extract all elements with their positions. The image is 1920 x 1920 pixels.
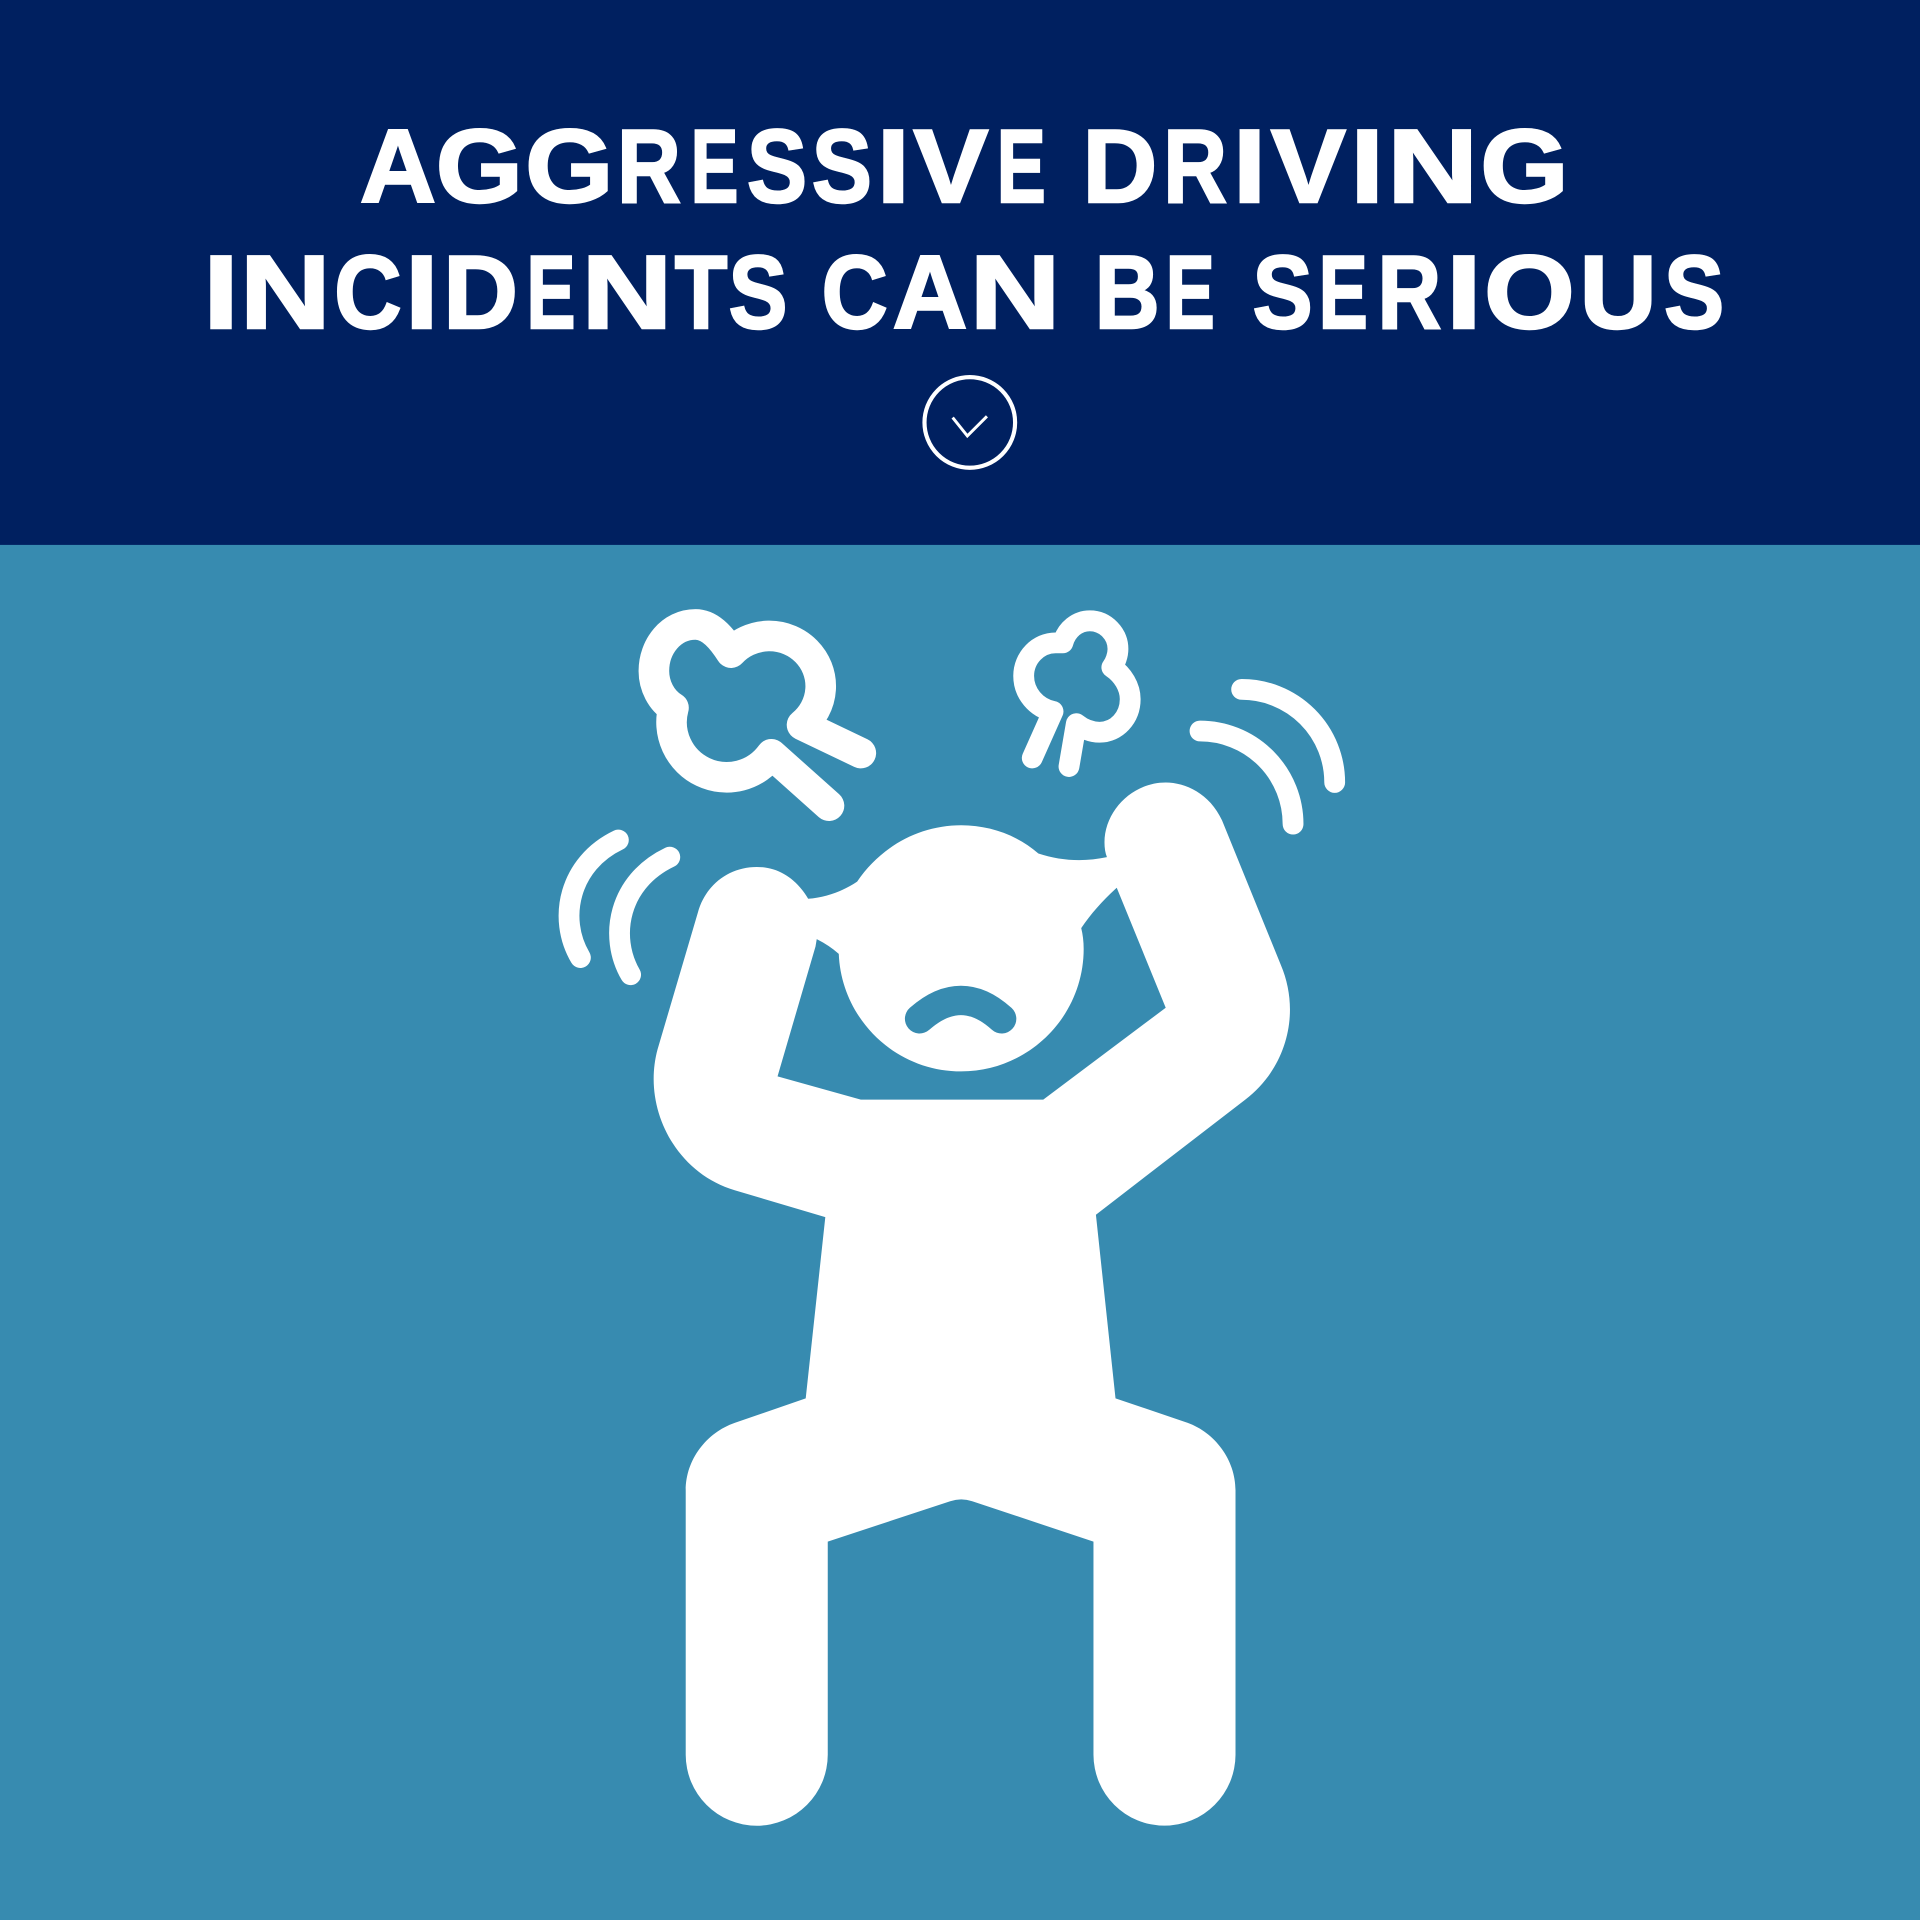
motion arcs: left	[569, 840, 670, 975]
title line 1: S	[747, 109, 807, 225]
title line 2: E	[1166, 235, 1215, 351]
title line 1: E	[997, 109, 1046, 225]
title line 1: I	[1233, 109, 1266, 225]
title line 2: N	[240, 235, 331, 351]
figure body and raised arms	[654, 782, 1290, 1826]
title line 1: N	[1387, 109, 1478, 225]
title line 1: S	[812, 109, 872, 225]
title line 2: C	[334, 235, 402, 351]
title line 1: D	[1082, 109, 1157, 225]
title line 2: I	[405, 235, 438, 351]
title line 2: D	[443, 235, 518, 351]
title line 2: E	[527, 235, 576, 351]
title line 2: S	[1664, 235, 1724, 351]
title line 2: R	[1378, 235, 1441, 351]
title line 2: S	[729, 235, 787, 351]
steam puff: small	[1024, 621, 1130, 767]
title line 1: G	[436, 109, 523, 225]
title line 1: R	[617, 109, 681, 225]
title line 2: I	[1446, 235, 1482, 351]
motion arcs: right	[1200, 689, 1335, 824]
title line 1: I	[1351, 109, 1384, 225]
title line 2: N	[970, 235, 1060, 351]
title line 2: T	[675, 235, 727, 351]
title line 1: E	[691, 109, 738, 225]
title line 1: G	[525, 109, 613, 225]
title line 2: C	[822, 235, 888, 351]
title line 1: G	[1480, 109, 1569, 225]
title line 1: A	[360, 109, 436, 225]
frowning mouth	[920, 1000, 1002, 1019]
title line 1: R	[1163, 109, 1227, 225]
title line 2: A	[893, 235, 967, 351]
gap between arms and head	[778, 888, 1166, 1100]
panel: lower teal background	[0, 545, 1920, 1920]
title line 1: I	[877, 109, 910, 225]
title line 2: U	[1580, 235, 1657, 351]
icon: angry person	[569, 621, 1335, 1826]
title line 2: O	[1484, 235, 1575, 351]
title line 2: B	[1095, 235, 1160, 351]
title	[203, 109, 1724, 351]
title line 2: N	[582, 235, 672, 351]
title line 2: I	[203, 235, 239, 351]
title line 1: V	[1271, 109, 1346, 225]
title line 2: E	[1319, 235, 1368, 351]
steam puff: large	[654, 624, 861, 806]
panel: navy header	[0, 0, 1920, 545]
title line 2: S	[1253, 235, 1313, 351]
icon: chevron in circle	[924, 377, 1015, 468]
title line 1: V	[913, 109, 988, 225]
